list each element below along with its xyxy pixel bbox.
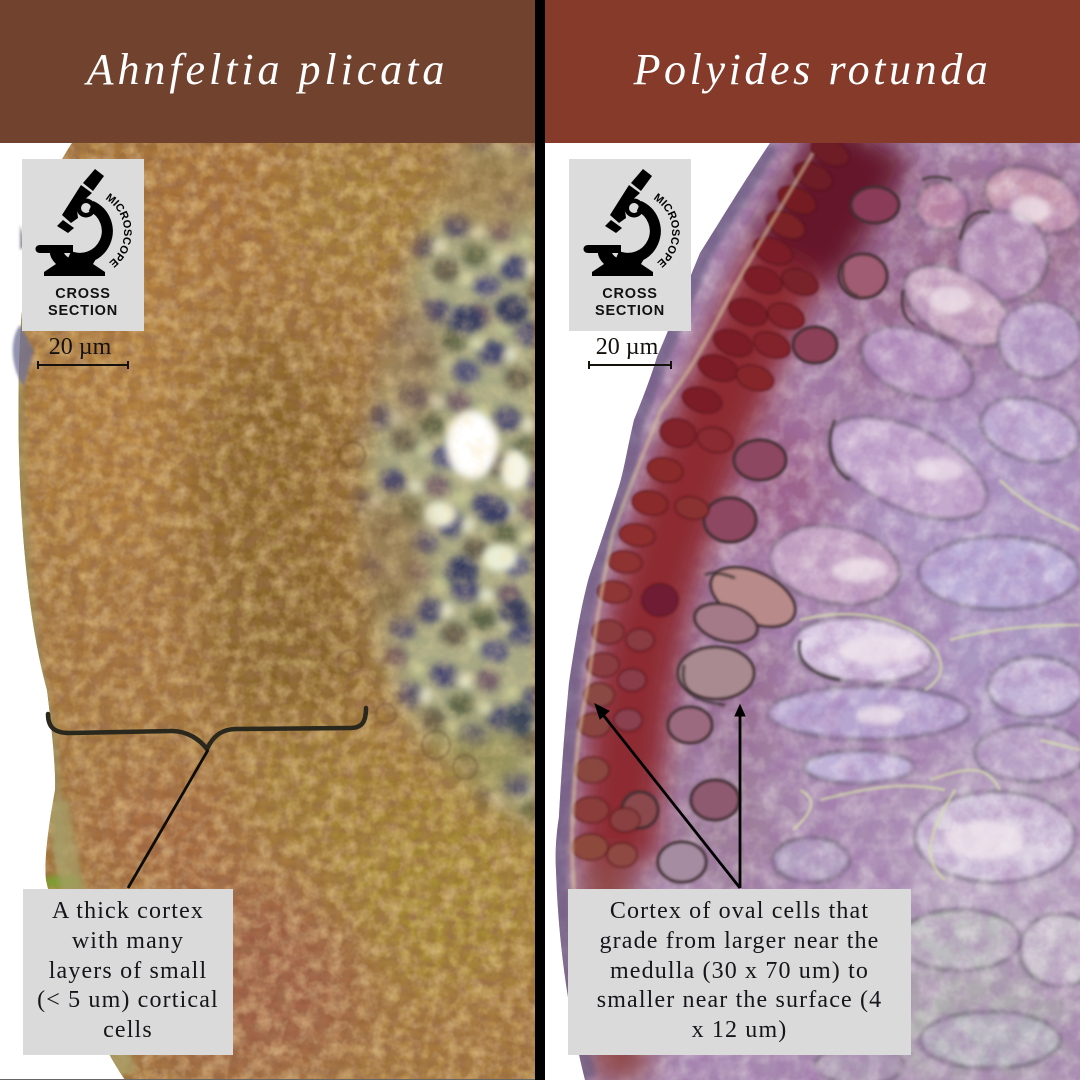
mottled cell contents: [545, 143, 1080, 1080]
callout left: with many: [72, 928, 184, 954]
callout right: Cortex of oval cells that: [610, 898, 869, 924]
label: CROSS SECTION: SECTION: [595, 303, 665, 319]
label: CROSS SECTION: CROSS: [602, 286, 658, 302]
label: MICROSCOPE: MICROSCOPE: [654, 193, 680, 268]
label: CROSS SECTION: CROSS: [55, 286, 111, 302]
pale green cell walls: [793, 480, 1080, 880]
arrow to outer cortical cell: [595, 704, 740, 888]
purple outer fringe of the thallus: [556, 143, 768, 1080]
header left background with title: [0, 0, 535, 143]
pink inner cortical cells: [622, 187, 899, 882]
icon: microscope: [584, 169, 655, 276]
medulla tissue: [350, 143, 535, 842]
scale bar left: [38, 361, 128, 369]
panel: Ahnfeltia plicata micrograph: [0, 130, 560, 1080]
callout right: x 12 um): [692, 1017, 787, 1043]
boundary cells: [338, 442, 477, 779]
header right background with title: [545, 0, 1080, 143]
callout right: grade from larger near the: [600, 928, 880, 954]
medullary cells: [764, 155, 1080, 1080]
label: CROSS SECTION: SECTION: [48, 303, 118, 319]
callout left: cells: [103, 1017, 153, 1043]
cortex dark band: [608, 135, 870, 1080]
callout right: medulla (30 x 70 um) to: [610, 958, 869, 984]
header right background with title: Polyides rotunda: [634, 45, 991, 94]
panel: Polyides rotunda micrograph: [545, 133, 1080, 1080]
scale label left: 20 µm: [49, 334, 111, 360]
dark cell arcs: [683, 177, 990, 705]
callout left: [23, 889, 233, 1055]
icon: microscope: [36, 169, 107, 276]
header left background with title: Ahnfeltia plicata: [87, 45, 448, 94]
scale label right: 20 µm: [596, 334, 658, 360]
pale cuticle line: [572, 153, 813, 930]
annotation: brace over cortex: [48, 708, 366, 749]
callout left: (< 5 um) cortical: [37, 987, 219, 1013]
callout left: A thick cortex: [52, 898, 204, 924]
microscope badge right: [569, 159, 691, 331]
arrow to inner cortical cell: [735, 705, 745, 888]
microscope badge left: [22, 159, 144, 331]
bottom edge line: [0, 1079, 535, 1080]
callout right: smaller near the surface (4: [597, 987, 882, 1013]
label: MICROSCOPE: MICROSCOPE: [106, 193, 132, 268]
callout left: layers of small: [49, 958, 207, 984]
outer cortical cells: [572, 133, 853, 867]
divider bar: [535, 0, 545, 1080]
callout right: [568, 889, 911, 1055]
scale bar right: [589, 361, 671, 369]
annotation: connector line from brace to callout: [128, 750, 208, 888]
